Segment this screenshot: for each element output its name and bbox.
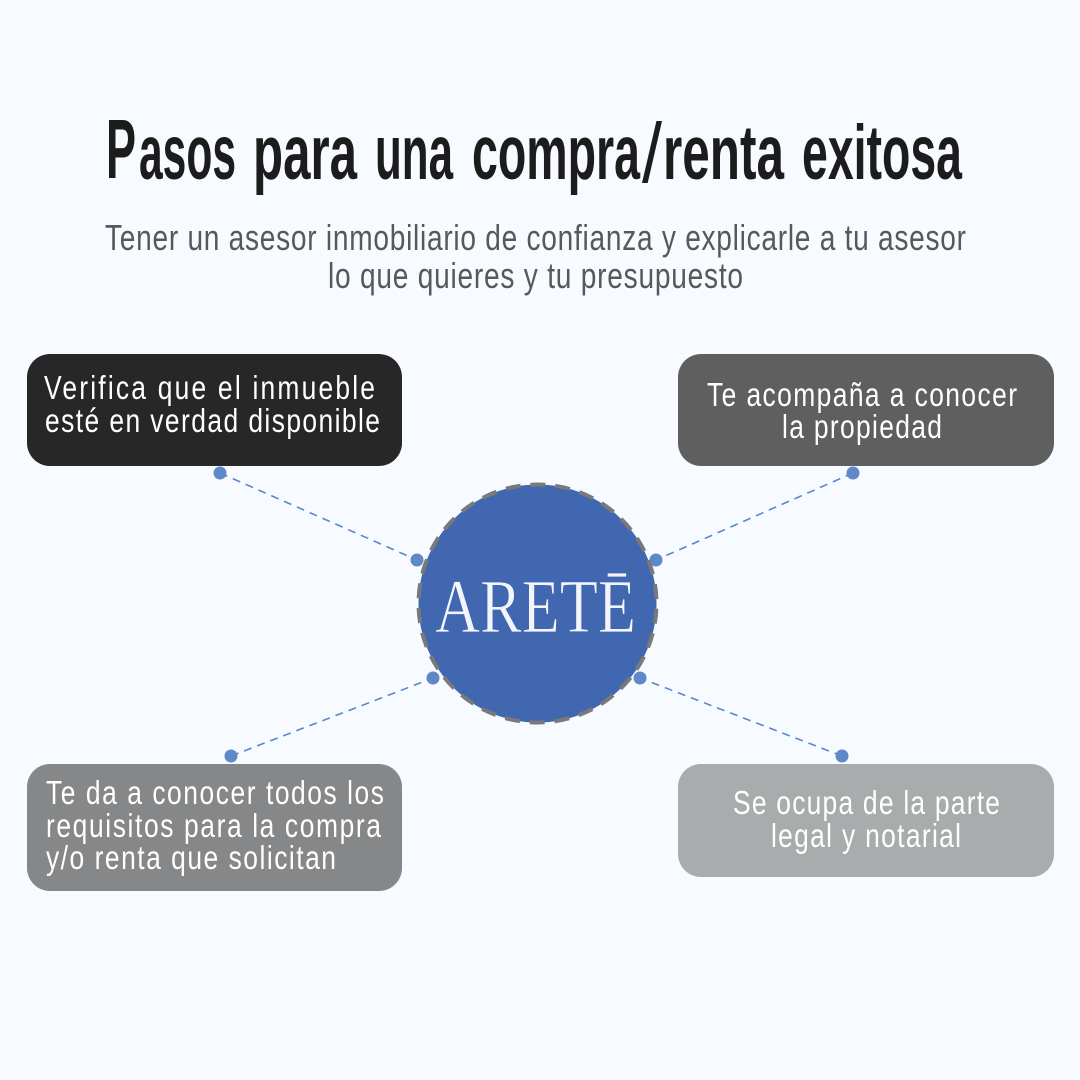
connector: bottom right <box>634 672 848 762</box>
title: asos <box>139 110 236 196</box>
subtitle: lo que quieres y tu presupuesto <box>328 256 743 296</box>
panel: requisitos: requisitos para la compra <box>46 808 381 845</box>
connector: top right <box>650 466 860 566</box>
title: exitosa <box>802 110 963 196</box>
panel: requisitos: y/o renta que solicitan <box>46 840 336 877</box>
title: compra <box>472 110 641 196</box>
panel: requisitos <box>27 764 402 891</box>
panel: verifica: Verifica que el inmueble <box>44 370 375 407</box>
connector: bottom left <box>224 672 440 762</box>
panel: requisitos: Te da a conocer todos los <box>46 775 384 812</box>
central logo circle: ARETĒ <box>435 565 636 649</box>
title: P <box>106 102 136 196</box>
panel: verifica <box>27 354 402 466</box>
title <box>106 102 963 200</box>
panel: legal: legal y notarial <box>771 818 961 855</box>
title: / <box>642 106 663 200</box>
title: renta <box>663 110 785 196</box>
subtitle: Tener un asesor inmobiliario de confianza y explicarle a tu asesor <box>105 218 966 258</box>
panel: acompaña <box>678 354 1054 466</box>
subtitle <box>105 218 966 296</box>
panel: legal <box>678 764 1054 877</box>
title: para <box>253 110 358 196</box>
panel: acompaña: la propiedad <box>782 409 942 446</box>
panel: legal: Se ocupa de la parte <box>733 785 1000 822</box>
title: una <box>375 110 454 196</box>
central logo circle <box>418 484 656 722</box>
panel: verifica: esté en verdad disponible <box>45 403 380 440</box>
panel: acompaña: Te acompaña a conocer <box>707 377 1017 414</box>
connector: top left <box>214 466 424 566</box>
